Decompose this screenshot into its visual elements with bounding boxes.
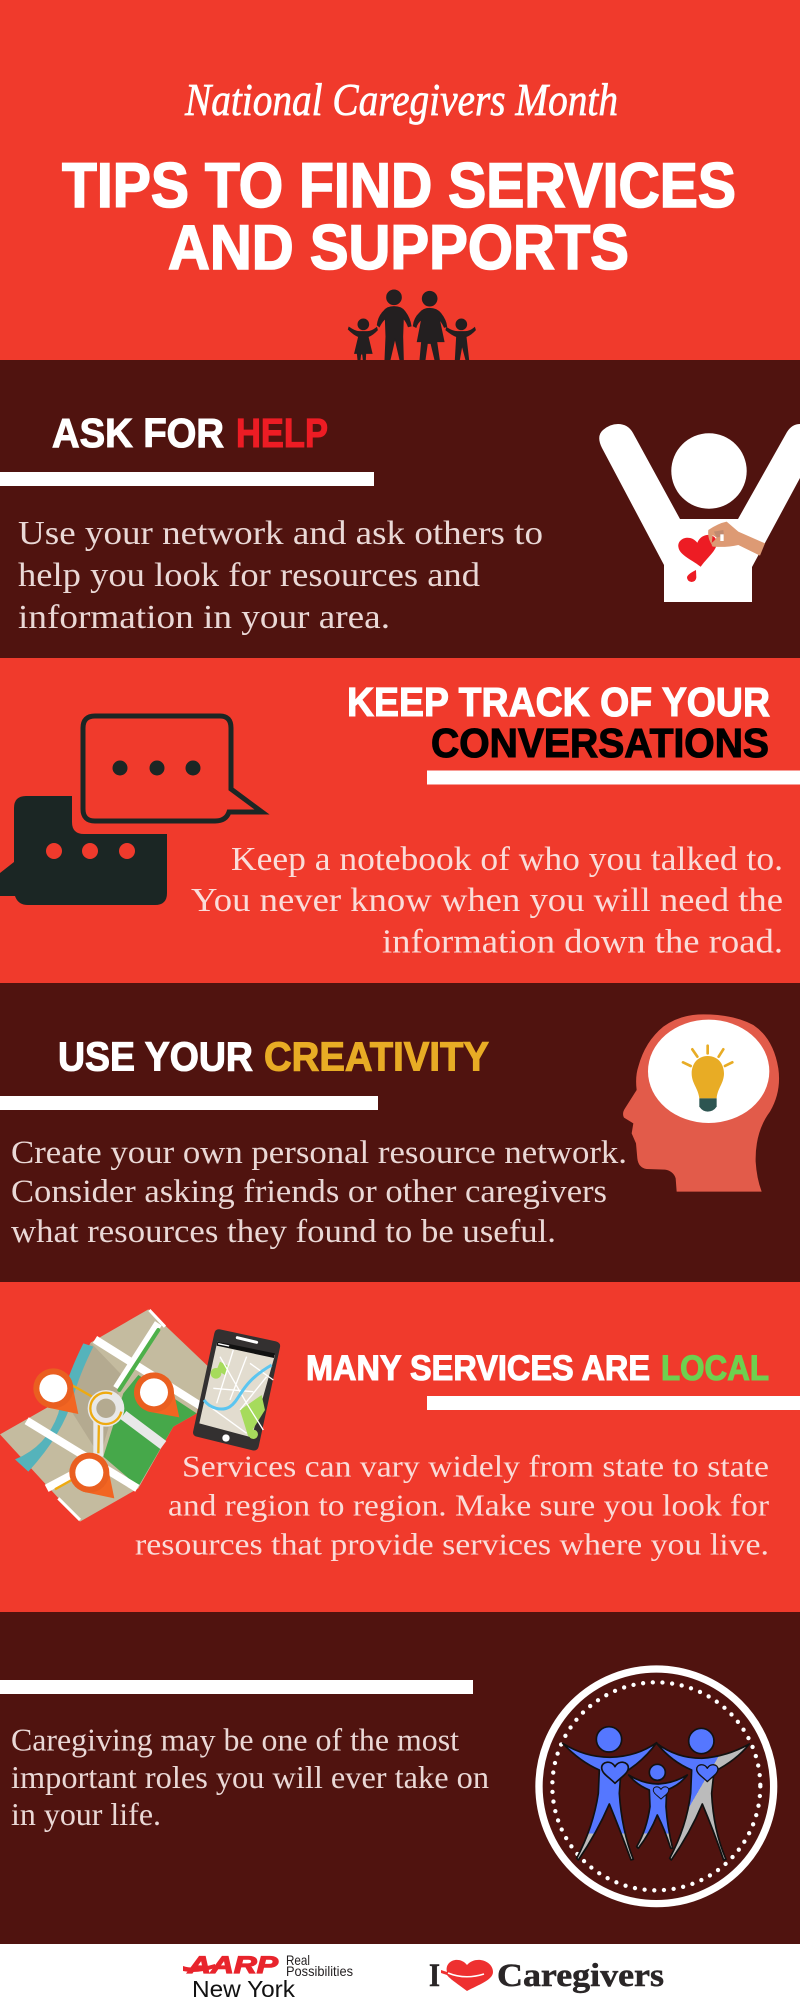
body text: Services can vary widely from state to state (182, 1448, 769, 1484)
body text: help you look for resources and (18, 557, 480, 594)
panel: ask for help (0, 360, 800, 658)
logo: I love Caregivers: I (429, 1958, 440, 1994)
divider bar (0, 1096, 378, 1110)
icon: family in circle (539, 1669, 774, 1904)
logo: AARP New York: Real (286, 1952, 310, 1968)
body text: important roles you will ever take on (11, 1759, 489, 1795)
heading: ask for help: HELP (236, 410, 328, 456)
panel: keep track (0, 658, 800, 983)
body text: Keep a notebook of who you talked to. (231, 841, 783, 878)
heading: use your creativity: CREATIVITY (264, 1034, 489, 1080)
title: TIPS TO FIND SERVICES (62, 151, 736, 221)
body text (18, 515, 543, 636)
icon: head with light bulb (623, 1014, 779, 1192)
body text: Consider asking friends or other caregivers (11, 1174, 607, 1210)
body text: Use your network and ask others to (18, 515, 543, 552)
divider bar (427, 770, 800, 784)
panel: local services (0, 1282, 800, 1612)
title: AND SUPPORTS (168, 213, 629, 283)
icon: family silhouette (348, 290, 475, 360)
body text (191, 841, 783, 960)
logo: AARP New York: AARP (187, 1952, 279, 1979)
divider bar (427, 1396, 800, 1410)
panel: creativity (0, 983, 800, 1282)
script subtitle: National Caregivers Month (184, 74, 618, 125)
panel: header (0, 0, 800, 360)
body text: information down the road. (382, 924, 783, 960)
heading: ask for help (52, 410, 328, 456)
heading: keep track of your conversations: CONVERSATIONS (431, 720, 769, 766)
panel: closing message (0, 1612, 800, 1944)
logo: AARP New York (183, 1952, 353, 2000)
heading: ask for help: ASK FOR (52, 410, 224, 456)
heading: use your creativity (58, 1034, 489, 1080)
body text (11, 1722, 489, 1832)
body text: You never know when you will need the (191, 882, 783, 919)
icon: speech bubbles (0, 716, 262, 905)
icon: phone with map (193, 1329, 280, 1450)
logo: AARP New York: Possibilities (286, 1963, 353, 1979)
body text: Create your own personal resource network. (11, 1135, 627, 1171)
heading: keep track of your conversations: KEEP TRACK OF YOUR (347, 679, 770, 725)
body text: information in your area. (18, 599, 390, 636)
heading: many services are local: MANY SERVICES ARE (306, 1349, 650, 1388)
heading: many services are local: LOCAL (661, 1349, 769, 1388)
panel: footer logos (0, 1944, 800, 2000)
logo: I love Caregivers (429, 1958, 664, 1994)
body text: in your life. (11, 1796, 161, 1832)
body text (135, 1448, 770, 1562)
divider bar (0, 472, 374, 486)
icon: folded map with pins (0, 1309, 280, 1522)
heading: use your creativity: USE YOUR (58, 1034, 253, 1080)
body text: Caregiving may be one of the most (11, 1722, 459, 1758)
body text (11, 1135, 627, 1250)
body text: resources that provide services where you live. (135, 1526, 769, 1562)
heading: keep track of your conversations (347, 679, 770, 766)
icon: person with heart (599, 424, 800, 602)
divider bar (0, 1680, 473, 1694)
body text: and region to region. Make sure you look for (168, 1488, 770, 1522)
body text: what resources they found to be useful. (11, 1214, 556, 1250)
title (62, 151, 736, 283)
logo: I love Caregivers: Caregivers (497, 1958, 664, 1994)
